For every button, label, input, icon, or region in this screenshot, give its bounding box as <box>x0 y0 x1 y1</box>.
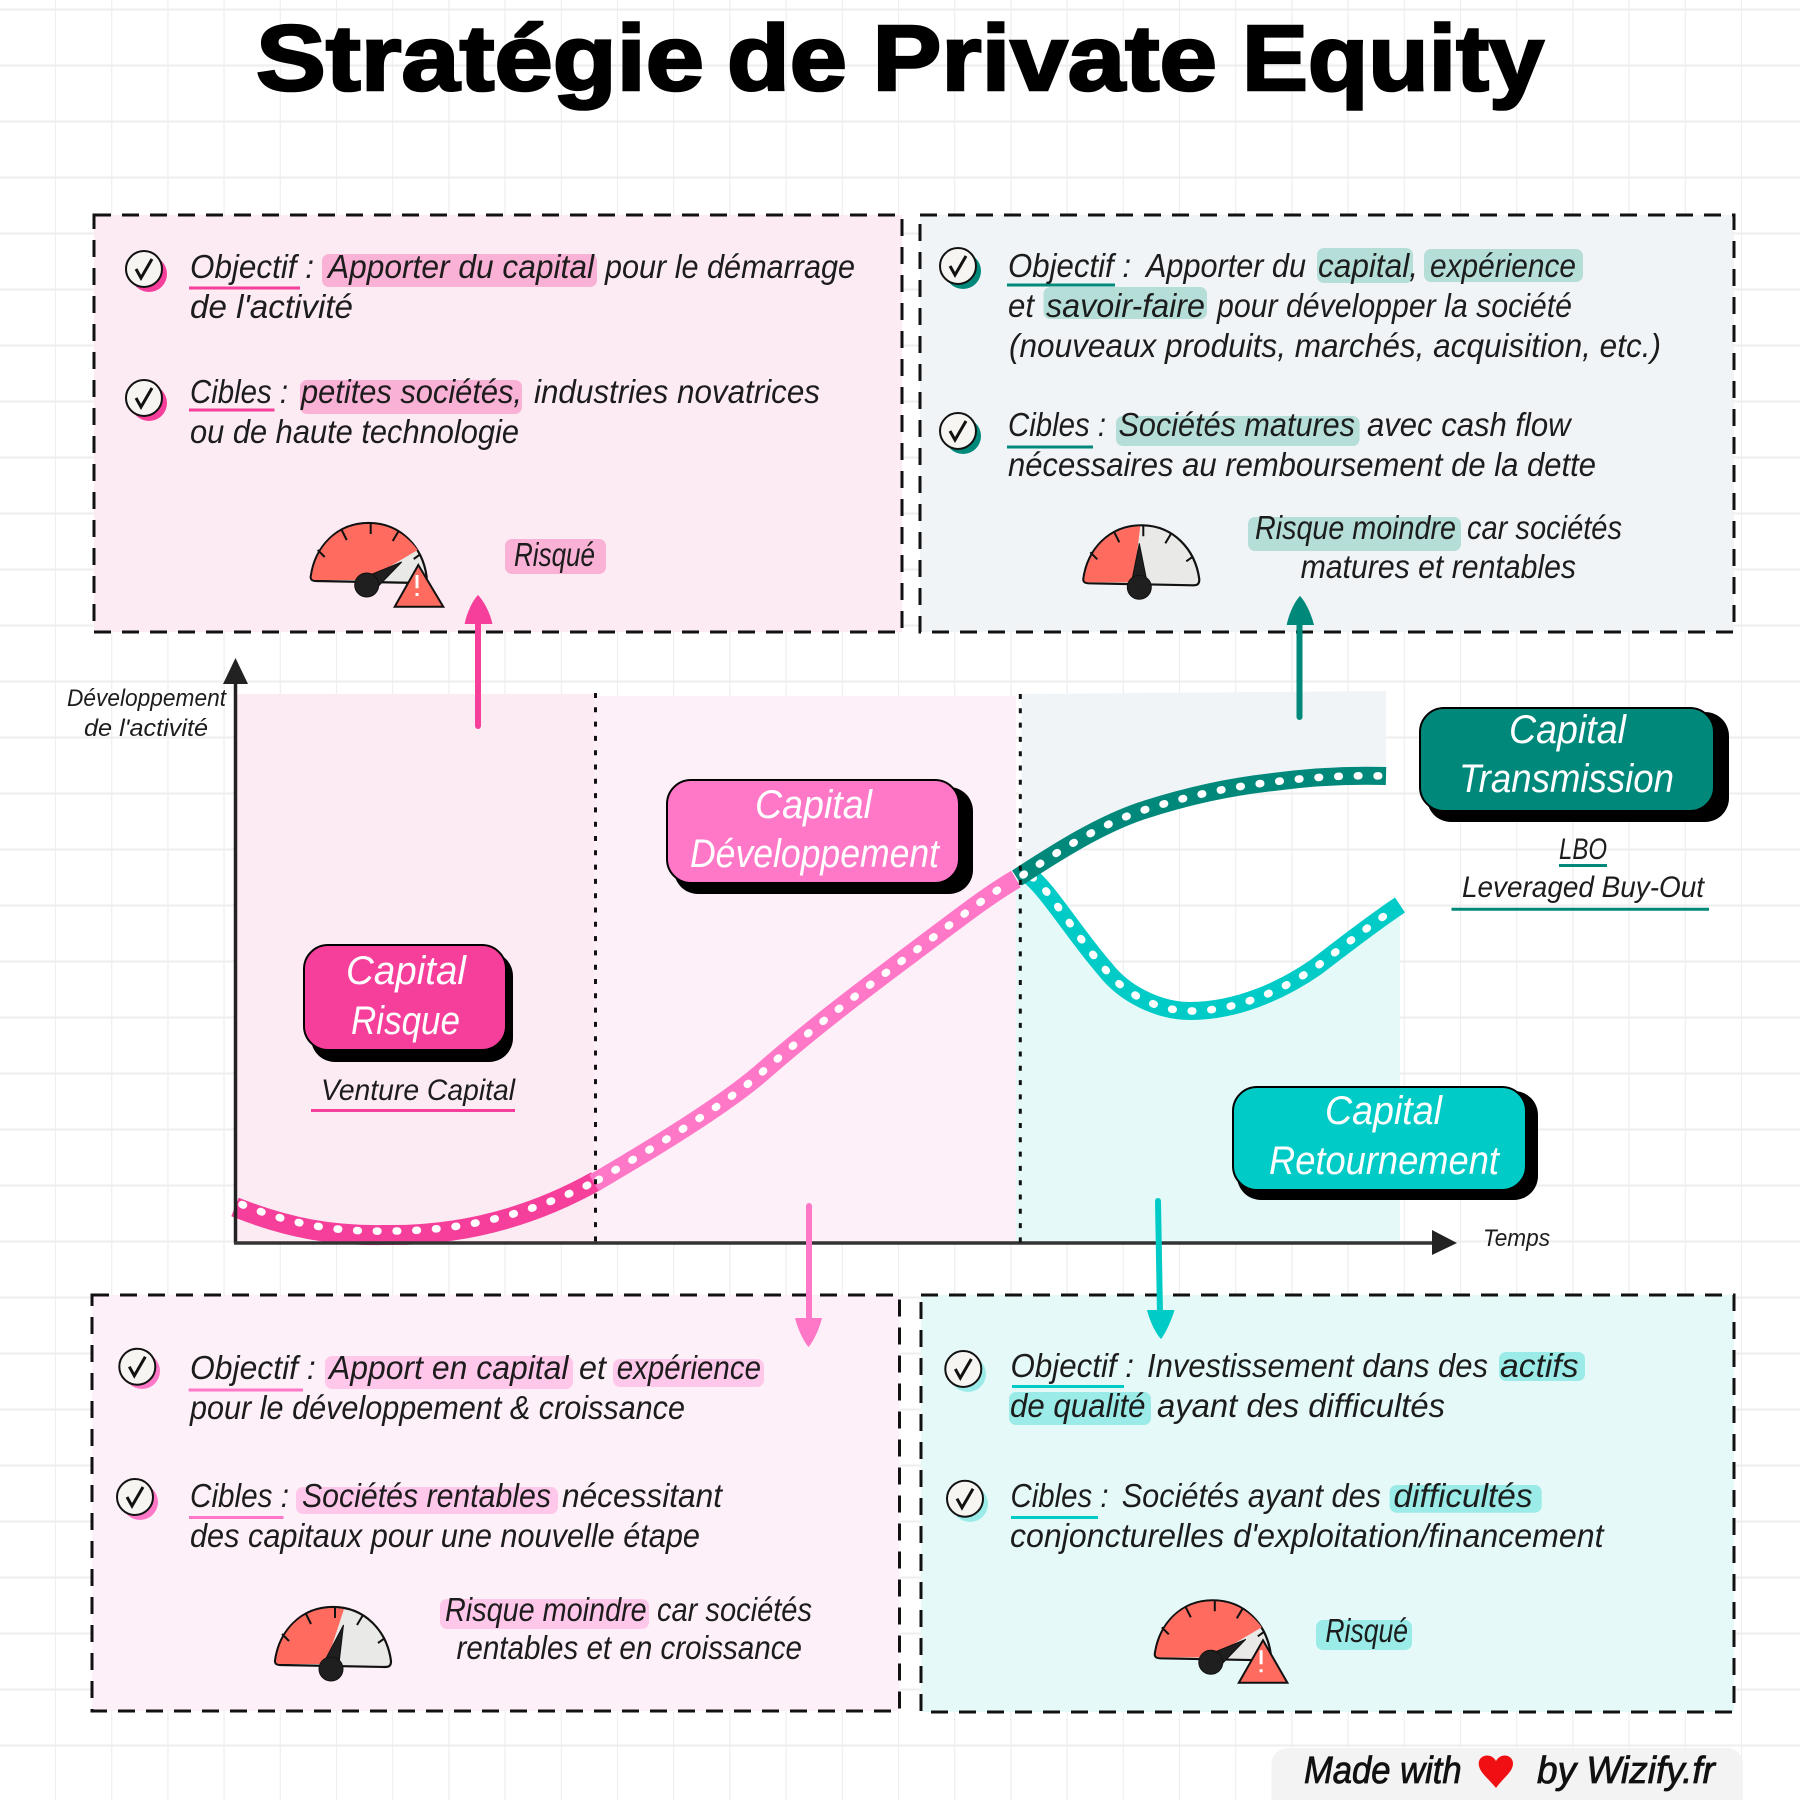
title <box>256 6 1544 110</box>
y axis label <box>67 685 227 742</box>
icon: check objectif <box>126 251 167 292</box>
icon: gauge high risk <box>311 523 443 607</box>
icon: check objectif <box>945 1351 986 1392</box>
text: cibles: Cibles : <box>190 373 288 410</box>
y axis label: de l'activité <box>84 715 208 742</box>
text: risque moindre: Risque moindre <box>1255 509 1456 546</box>
text: objectif: Objectif : <box>190 248 314 285</box>
sublabel: LBO: LBO <box>1559 833 1607 866</box>
highlight: sociétés rentables <box>296 1487 558 1514</box>
text: cibles <box>1008 406 1596 483</box>
text: objectif <box>189 1349 761 1426</box>
panel: capital risque <box>94 215 902 632</box>
text: objectif: et <box>1008 287 1036 324</box>
sublabel: venture capital: Venture Capital <box>321 1074 516 1107</box>
highlights: capital, expérience, savoir-faire <box>1044 248 1583 319</box>
text: objectif: Apporter du <box>1144 247 1306 284</box>
text: objectif <box>190 248 855 325</box>
text: objectif: ayant des difficultés <box>1157 1387 1445 1424</box>
arrow: capital risque to panel <box>465 595 492 726</box>
underline: objectif <box>1007 284 1115 286</box>
text: objectif: de qualité <box>1010 1387 1146 1424</box>
underline: objectif <box>189 286 300 290</box>
title: Private <box>872 6 1217 110</box>
icon: gauge medium risk <box>1083 525 1199 599</box>
text: objectif: capital, <box>1318 247 1418 284</box>
text: objectif: Apport en capital <box>327 1349 570 1386</box>
badge: capital risque: Capital <box>346 949 467 993</box>
icon: gauge high risk <box>1155 1600 1287 1683</box>
icon: check cibles <box>947 1481 988 1522</box>
icon: check cibles <box>117 1479 158 1520</box>
text: objectif: pour le développement & croissance <box>189 1389 685 1426</box>
underline: cibles <box>1011 1516 1098 1519</box>
badge: capital transmission: Capital <box>1509 708 1627 752</box>
highlight: difficultés <box>1390 1485 1542 1513</box>
icon: heart <box>1479 1756 1513 1788</box>
text: objectif: actifs <box>1500 1347 1579 1384</box>
text: risque moindre: rentables et en croissance <box>456 1629 802 1666</box>
badge: capital retournement: Retournement <box>1269 1139 1501 1183</box>
text: cibles: ou de haute technologie <box>190 413 519 450</box>
text: cibles: Cibles : <box>190 1477 289 1514</box>
text: objectif: Objectif : <box>1008 247 1131 284</box>
text: objectif: pour développer la société <box>1216 287 1572 324</box>
text: objectif <box>1008 247 1661 364</box>
badge: capital développement <box>667 780 973 894</box>
icon: gauge medium risk <box>275 1607 391 1681</box>
band: capital transmission zone <box>1022 691 1386 877</box>
text: cibles: Cibles : <box>1010 1477 1108 1514</box>
underline: cibles <box>1007 446 1093 448</box>
badge: risqué: Risqué <box>514 536 595 573</box>
footer: made with love badge: by Wizify.fr <box>1537 1750 1716 1792</box>
curve: capital risque <box>235 1180 598 1235</box>
text: cibles: avec cash flow <box>1367 406 1573 443</box>
badge: capital développement: Développement <box>690 832 941 876</box>
text: cibles <box>190 1477 724 1554</box>
badge: risqué: Risqué <box>1325 1612 1408 1649</box>
panel: capital développement <box>92 1295 900 1711</box>
text: objectif: (nouveaux produits, marchés, acquisition, etc.) <box>1009 327 1661 364</box>
text: cibles <box>190 373 820 450</box>
text: objectif: et <box>579 1349 608 1386</box>
text: objectif: Objectif : <box>190 1349 316 1386</box>
text: objectif: Investissement dans des <box>1147 1347 1488 1384</box>
curve: capital transmission <box>1017 776 1386 878</box>
footer: made with love badge <box>1272 1748 1743 1800</box>
badge: capital développement: Capital <box>755 783 873 827</box>
highlight: sociétés matures <box>1116 416 1360 446</box>
badge: capital risque: Risque <box>351 999 460 1043</box>
x axis <box>234 1230 1457 1255</box>
badge: capital risque <box>304 945 513 1062</box>
sublabel: LBO: Leveraged Buy-Out <box>1462 871 1706 904</box>
band: capital retournement zone <box>1016 876 1400 1243</box>
underline: cibles <box>189 1516 284 1519</box>
underline: objectif <box>189 1388 303 1392</box>
badge: capital retournement: Capital <box>1325 1089 1443 1133</box>
text: cibles: Sociétés ayant des <box>1122 1477 1381 1514</box>
arrow: capital retournement to panel <box>1147 1201 1174 1339</box>
text: cibles: nécessitant <box>562 1477 724 1514</box>
text: objectif: expérience <box>617 1349 761 1386</box>
y axis label: Développement <box>67 685 227 712</box>
underline: objectif <box>1012 1385 1124 1388</box>
text: objectif: expérience <box>1430 247 1576 284</box>
text: objectif: pour le démarrage <box>604 248 855 285</box>
band: capital risque zone <box>235 694 594 1243</box>
title: de <box>727 6 847 110</box>
text: objectif: de l'activité <box>190 288 353 325</box>
title: Stratégie <box>256 6 704 110</box>
text: cibles: Sociétés rentables <box>302 1477 551 1514</box>
text: cibles: difficultés <box>1394 1477 1532 1514</box>
text: objectif: savoir-faire <box>1046 287 1205 324</box>
icon: check cibles <box>126 380 167 421</box>
icon: check cibles <box>940 413 981 454</box>
panel: capital transmission <box>920 215 1734 632</box>
text: risque moindre: Risque moindre <box>445 1591 647 1628</box>
arrow: capital transmission to panel <box>1287 596 1314 717</box>
text: cibles: Sociétés matures <box>1118 406 1355 443</box>
text: risque moindre <box>440 1591 812 1666</box>
x axis label: Temps <box>1483 1225 1550 1252</box>
text: objectif: Apporter du capital <box>326 248 596 285</box>
text: risque moindre: matures et rentables <box>1301 548 1576 585</box>
panel: capital retournement <box>921 1295 1734 1712</box>
curve: capital développement <box>594 879 1016 1183</box>
text: cibles: des capitaux pour une nouvelle étape <box>190 1517 700 1554</box>
icon: check objectif <box>119 1349 160 1389</box>
underline: cibles <box>189 408 274 412</box>
text: objectif: Objectif : <box>1010 1347 1134 1384</box>
sublabel: LBO <box>1452 833 1709 909</box>
highlights: apport en capital, expérience <box>325 1356 764 1389</box>
badge: capital transmission: Transmission <box>1459 757 1674 801</box>
badge: capital retournement <box>1233 1087 1538 1200</box>
band: capital développement zone <box>594 696 1016 1243</box>
badge: capital transmission <box>1420 708 1729 822</box>
chart: private equity lifecycle <box>67 658 1729 1255</box>
arrow: capital développement to panel <box>795 1206 822 1347</box>
y axis <box>223 658 248 1243</box>
footer: made with love badge: Made with <box>1304 1750 1462 1792</box>
curve: capital retournement <box>1027 874 1400 1011</box>
text: objectif <box>1010 1347 1579 1424</box>
text: cibles: petites sociétés, <box>300 373 522 410</box>
text: risque moindre <box>1248 509 1622 585</box>
title: Equity <box>1242 6 1544 110</box>
text: cibles: nécessaires au remboursement de la dette <box>1008 446 1596 483</box>
text: risque moindre: car sociétés <box>657 1591 812 1628</box>
highlights: actifs, de qualité <box>1009 1352 1585 1425</box>
text: risque moindre: car sociétés <box>1467 509 1622 546</box>
text: cibles: industries novatrices <box>534 373 820 410</box>
icon: check objectif <box>940 248 981 289</box>
text: cibles: Cibles : <box>1008 406 1106 443</box>
text: cibles: conjoncturelles d'exploitation/financement <box>1010 1517 1605 1554</box>
highlight: petites sociétés <box>300 380 522 414</box>
highlight: apporter du capital <box>322 254 597 287</box>
text: cibles <box>1010 1477 1605 1554</box>
